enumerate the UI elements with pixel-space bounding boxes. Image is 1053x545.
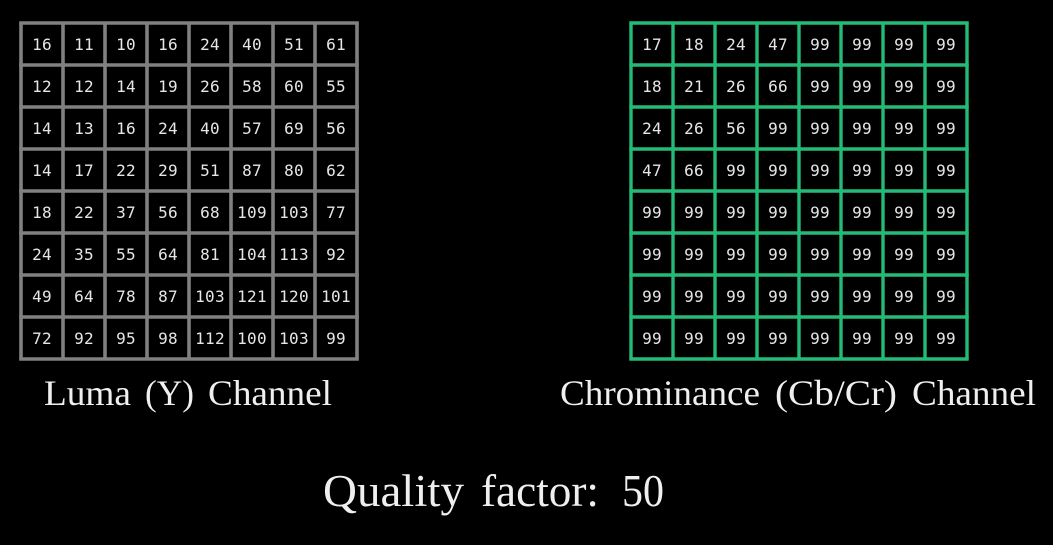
luma quantization table: 29 — [158, 161, 178, 180]
luma channel label: Luma — [44, 373, 131, 413]
luma quantization table: 14 — [32, 161, 52, 180]
luma quantization table: 12 — [74, 77, 94, 96]
luma quantization table: 77 — [326, 203, 346, 222]
luma quantization table: 10 — [116, 35, 136, 54]
luma quantization table: 51 — [284, 35, 304, 54]
chrominance quantization table: 24 — [726, 35, 746, 54]
quality factor caption — [323, 466, 664, 516]
chrominance quantization table: 99 — [852, 119, 872, 138]
chrominance quantization table: 99 — [810, 77, 830, 96]
luma quantization table: 64 — [158, 245, 178, 264]
chrominance quantization table: 66 — [684, 161, 704, 180]
chrominance quantization table: 99 — [810, 35, 830, 54]
chrominance quantization table: 99 — [642, 245, 662, 264]
luma quantization table: 26 — [200, 77, 220, 96]
chrominance quantization table: 99 — [936, 161, 956, 180]
quality factor caption: 50 — [622, 466, 664, 516]
luma quantization table: 55 — [326, 77, 346, 96]
chrominance quantization table: 99 — [642, 287, 662, 306]
luma quantization table: 103 — [279, 329, 309, 348]
luma quantization table: 112 — [195, 329, 225, 348]
chrominance quantization table: 99 — [768, 119, 788, 138]
chrominance quantization table: 99 — [894, 287, 914, 306]
quality factor caption: factor: — [481, 466, 599, 516]
luma quantization table: 98 — [158, 329, 178, 348]
chrominance quantization table: 99 — [684, 245, 704, 264]
luma quantization table: 61 — [326, 35, 346, 54]
luma quantization table: 40 — [200, 119, 220, 138]
chrominance quantization table: 99 — [894, 203, 914, 222]
luma quantization table: 35 — [74, 245, 94, 264]
luma quantization table: 16 — [116, 119, 136, 138]
chrominance quantization table: 99 — [852, 287, 872, 306]
luma quantization table: 40 — [242, 35, 262, 54]
luma quantization table: 57 — [242, 119, 262, 138]
luma quantization table: 92 — [326, 245, 346, 264]
luma quantization table: 51 — [200, 161, 220, 180]
chrominance quantization table: 99 — [726, 203, 746, 222]
luma quantization table: 18 — [32, 203, 52, 222]
chrominance quantization table: 99 — [852, 329, 872, 348]
chrominance quantization table: 99 — [936, 329, 956, 348]
chrominance quantization table: 99 — [768, 161, 788, 180]
chrominance quantization table: 99 — [726, 287, 746, 306]
luma quantization table: 103 — [195, 287, 225, 306]
chrominance quantization table: 17 — [642, 35, 662, 54]
chrominance quantization table: 99 — [936, 77, 956, 96]
luma quantization table: 120 — [279, 287, 309, 306]
luma channel label: Channel — [208, 373, 332, 413]
chrominance channel label: Chrominance — [560, 373, 760, 413]
luma quantization table: 14 — [116, 77, 136, 96]
chrominance channel label: (Cb/Cr) — [775, 373, 897, 413]
luma channel label: (Y) — [145, 373, 194, 413]
luma quantization table: 22 — [116, 161, 136, 180]
chrominance quantization table: 99 — [726, 329, 746, 348]
luma channel label — [44, 373, 332, 413]
chrominance quantization table: 99 — [642, 203, 662, 222]
chrominance quantization table: 99 — [810, 329, 830, 348]
luma quantization table: 109 — [237, 203, 267, 222]
luma quantization table: 14 — [32, 119, 52, 138]
luma quantization table: 87 — [242, 161, 262, 180]
chrominance quantization table: 99 — [894, 77, 914, 96]
chrominance quantization table: 26 — [726, 77, 746, 96]
chrominance quantization table: 99 — [852, 77, 872, 96]
luma quantization table: 22 — [74, 203, 94, 222]
luma quantization table: 121 — [237, 287, 267, 306]
chrominance quantization table: 99 — [936, 245, 956, 264]
chrominance quantization table: 99 — [894, 119, 914, 138]
luma quantization table: 99 — [326, 329, 346, 348]
chrominance quantization table: 99 — [810, 161, 830, 180]
chrominance quantization table: 99 — [852, 203, 872, 222]
chrominance quantization table: 99 — [726, 245, 746, 264]
luma quantization table: 17 — [74, 161, 94, 180]
luma quantization table: 11 — [74, 35, 94, 54]
chrominance quantization table: 99 — [936, 287, 956, 306]
luma quantization table: 72 — [32, 329, 52, 348]
chrominance quantization table: 66 — [768, 77, 788, 96]
chrominance quantization table: 99 — [936, 35, 956, 54]
chrominance quantization table: 99 — [810, 287, 830, 306]
chrominance quantization table: 99 — [936, 203, 956, 222]
chrominance quantization table: 18 — [642, 77, 662, 96]
luma quantization table: 103 — [279, 203, 309, 222]
luma quantization table: 78 — [116, 287, 136, 306]
luma quantization table: 80 — [284, 161, 304, 180]
luma quantization table: 92 — [74, 329, 94, 348]
chrominance quantization table: 99 — [768, 203, 788, 222]
chrominance channel label: Channel — [912, 373, 1036, 413]
luma quantization table — [19, 23, 359, 359]
chrominance quantization table: 99 — [684, 203, 704, 222]
luma quantization table: 13 — [74, 119, 94, 138]
chrominance quantization table: 99 — [894, 161, 914, 180]
luma quantization table: 56 — [326, 119, 346, 138]
luma quantization table: 16 — [32, 35, 52, 54]
chrominance quantization table — [629, 23, 969, 359]
chrominance quantization table: 99 — [810, 119, 830, 138]
chrominance channel label — [560, 373, 1036, 413]
luma quantization table: 87 — [158, 287, 178, 306]
luma quantization table: 49 — [32, 287, 52, 306]
luma quantization table: 56 — [158, 203, 178, 222]
luma quantization table: 81 — [200, 245, 220, 264]
chrominance quantization table: 99 — [894, 245, 914, 264]
luma quantization table: 64 — [74, 287, 94, 306]
chrominance quantization table: 99 — [768, 329, 788, 348]
chrominance quantization table: 99 — [894, 329, 914, 348]
luma quantization table: 16 — [158, 35, 178, 54]
chrominance quantization table: 47 — [642, 161, 662, 180]
chrominance quantization table: 99 — [684, 329, 704, 348]
chrominance quantization table: 99 — [768, 245, 788, 264]
chrominance quantization table: 99 — [894, 35, 914, 54]
luma quantization table: 113 — [279, 245, 309, 264]
chrominance quantization table: 99 — [726, 161, 746, 180]
quality factor caption: Quality — [323, 466, 465, 516]
luma quantization table: 19 — [158, 77, 178, 96]
chrominance quantization table: 99 — [852, 245, 872, 264]
luma quantization table: 24 — [200, 35, 220, 54]
chrominance quantization table: 26 — [684, 119, 704, 138]
chrominance quantization table: 47 — [768, 35, 788, 54]
chrominance quantization table: 99 — [684, 287, 704, 306]
chrominance quantization table: 99 — [852, 35, 872, 54]
chrominance quantization table: 56 — [726, 119, 746, 138]
luma quantization table: 100 — [237, 329, 267, 348]
luma quantization table: 55 — [116, 245, 136, 264]
chrominance quantization table: 99 — [936, 119, 956, 138]
luma quantization table: 58 — [242, 77, 262, 96]
luma quantization table: 62 — [326, 161, 346, 180]
chrominance quantization table: 99 — [768, 287, 788, 306]
luma quantization table: 69 — [284, 119, 304, 138]
chrominance quantization table: 99 — [810, 203, 830, 222]
luma quantization table: 104 — [237, 245, 267, 264]
luma quantization table: 101 — [321, 287, 351, 306]
luma quantization table: 24 — [158, 119, 178, 138]
chrominance quantization table: 21 — [684, 77, 704, 96]
luma quantization table: 24 — [32, 245, 52, 264]
chrominance quantization table: 18 — [684, 35, 704, 54]
luma quantization table: 60 — [284, 77, 304, 96]
chrominance quantization table: 99 — [642, 329, 662, 348]
luma quantization table: 12 — [32, 77, 52, 96]
luma quantization table: 37 — [116, 203, 136, 222]
chrominance quantization table: 24 — [642, 119, 662, 138]
chrominance quantization table: 99 — [810, 245, 830, 264]
luma quantization table: 95 — [116, 329, 136, 348]
chrominance quantization table: 99 — [852, 161, 872, 180]
luma quantization table: 68 — [200, 203, 220, 222]
